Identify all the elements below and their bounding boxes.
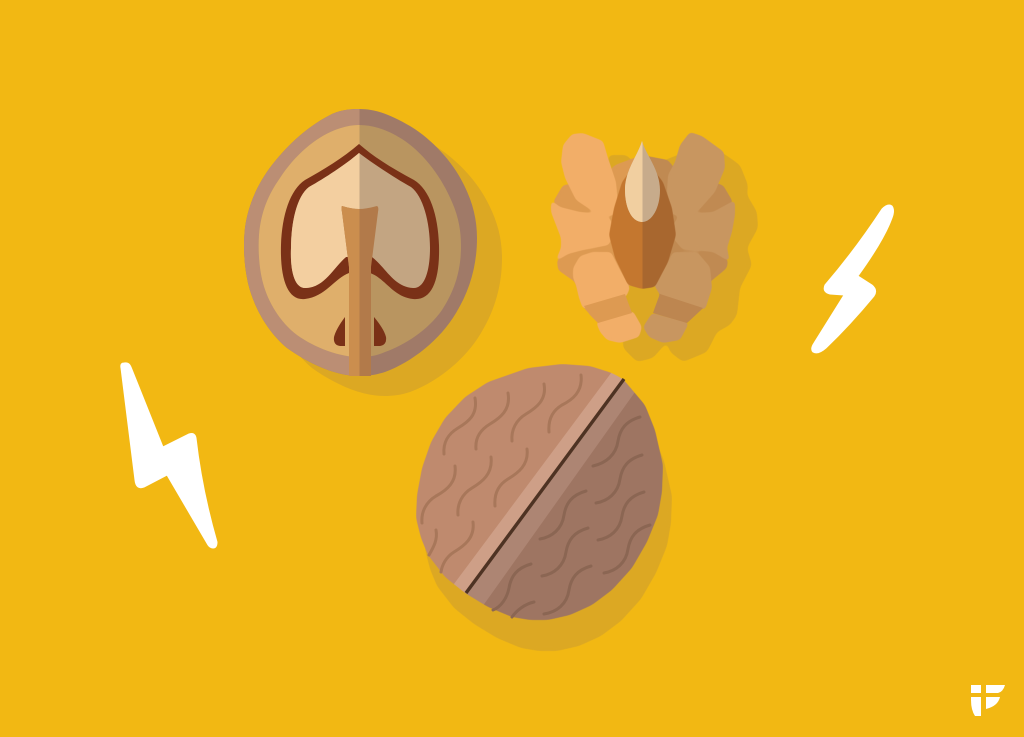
kernel shadow [608,150,758,362]
central stem [342,206,378,376]
light cavity [291,153,430,288]
outer shell [244,109,477,376]
left lobes [551,133,642,343]
band below third left lobe [584,294,632,323]
walnut cross-section [244,109,502,396]
whole walnut shadow [425,395,672,651]
band below third right lobe [653,294,703,323]
back layer of lobes, right [642,155,733,323]
almond-shaped seed [625,141,660,222]
lightning bolt right [812,205,894,353]
right lobes [643,132,735,343]
dark cavity outline [281,144,439,299]
walnut kernel [551,132,758,362]
shell: left half [416,364,612,594]
cross-section shadow [269,129,502,396]
logo [971,685,1005,716]
seam line [466,379,624,593]
shaded band [466,381,634,604]
wrinkles: right half [493,417,650,617]
seed marks [334,317,386,346]
highlight band [454,373,622,593]
illustration: walnuts on yellow background [120,109,1005,716]
inner flesh [259,125,461,357]
whole walnut [416,364,672,651]
shell: right half [484,392,663,620]
wrinkles: left half [422,375,581,572]
centre body [609,174,676,289]
back layer of lobes, left [553,155,642,323]
lightning bolt left [121,363,217,548]
shell [416,364,663,620]
